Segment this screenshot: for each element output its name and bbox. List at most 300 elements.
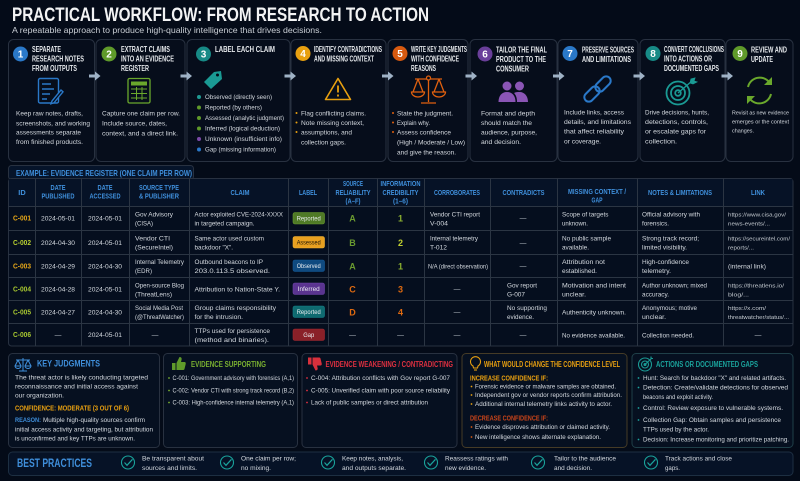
table header row: MISSING CONTEXT /: [568, 187, 626, 196]
step body: [645, 109, 709, 145]
practice 3: and outputs separate.: [342, 465, 406, 472]
step body: [481, 110, 537, 146]
row C-002: reports/...: [728, 246, 755, 252]
step body: [102, 110, 180, 137]
step body: screenshots, and working: [16, 120, 90, 127]
weakening list: C-005: Unverified claim with poor source reliability: [311, 388, 451, 395]
row C-002: (SecureIntel): [135, 245, 173, 252]
heading: ACTIONS OR DOCUMENTED GAPS: [656, 359, 758, 369]
actions list: Hunt: Search for backdoor "X" and related artifacts.: [643, 375, 786, 382]
icon: thumbs up: [172, 357, 186, 370]
step number 6: 6: [482, 50, 488, 61]
step bullets: collection gaps.: [301, 139, 346, 146]
icon: warning triangle: [326, 78, 350, 100]
row C-001: https://www.cisa.gov/: [728, 212, 787, 218]
row C-005: D: [349, 308, 356, 318]
step body: [732, 110, 789, 134]
practice 2: One claim per row;: [241, 456, 296, 463]
confidence rating: CONFIDENCE: MODERATE (3 OUT OF 6): [15, 404, 129, 412]
panel: what would change the confidence level: [462, 354, 627, 448]
reason: initial access activity and targeting, but attribution: [15, 426, 153, 433]
table header row: SOURCE: [343, 179, 363, 188]
step heading: REASONS: [411, 64, 436, 73]
row C-001: A: [349, 214, 356, 224]
row C-003: [13, 259, 766, 275]
step heading: REGISTER: [121, 64, 149, 73]
row C-003: 203.0.113.5 observed.: [194, 268, 270, 275]
judgment text: [15, 374, 148, 399]
step body: Drive decisions, hunts,: [645, 109, 709, 116]
row C-004: blog/...: [728, 292, 750, 298]
label legend: Observed (directly seen): [205, 94, 272, 101]
row C-003: established.: [562, 268, 597, 275]
label legend: Assessed (analytic judgment): [205, 115, 284, 122]
table header row: DATE: [98, 183, 113, 192]
arrows between steps: [89, 72, 733, 80]
step bullets: [296, 110, 366, 146]
row C-001: 2024-05-01: [88, 216, 122, 222]
title: PRACTICAL WORKFLOW: FROM RESEARCH TO ACTION: [12, 4, 429, 26]
row C-001: (CISA): [135, 220, 153, 227]
row C-001: Vendor CTI report: [430, 211, 480, 218]
step heading: [582, 46, 634, 64]
practice 5: [532, 456, 616, 472]
step heading: INTO ACTIONS OR: [664, 54, 712, 64]
row C-004: Motivation and intent: [562, 282, 626, 289]
row C-003: Internal Telemetry: [135, 259, 185, 266]
panel: step 2 extract claims: [96, 40, 185, 162]
practice 1: sources and limits.: [142, 465, 197, 472]
step number 1: 1: [18, 50, 24, 61]
practice 2: [220, 456, 296, 472]
row C-004: 3: [398, 284, 403, 294]
step number 5: 5: [397, 49, 403, 60]
step body: context, and a direct link.: [102, 130, 178, 137]
supporting list: C-002: Vendor CTI with strong track record (B,2): [172, 388, 294, 395]
step number 9: 9: [737, 49, 743, 60]
actions list: [638, 375, 789, 444]
step heading: UPDATE: [751, 55, 773, 64]
step body: Capture one claim per row.: [102, 110, 180, 117]
table header row: RELIABILITY: [336, 188, 371, 197]
step bullets: State the judgment.: [397, 110, 453, 117]
row C-004: —: [454, 286, 461, 293]
table header row: CREDIBILITY: [382, 188, 419, 197]
row C-006: —: [520, 332, 527, 339]
table header row: (A–F): [346, 196, 361, 206]
row C-004: 2024-05-01: [88, 286, 122, 293]
row C-002: Same actor used custom: [194, 236, 264, 243]
heading: EVIDENCE SUPPORTING: [191, 359, 266, 369]
row C-005: Group claims responsibility: [194, 305, 277, 312]
row C-005: 4: [398, 308, 403, 318]
panel: step 1 separate research notes: [8, 40, 94, 162]
row C-003: 2024-04-30: [88, 263, 122, 270]
row C-001: Actor exploited CVE-2024-XXXX: [194, 211, 283, 218]
row C-001: Official advisory with: [642, 211, 700, 218]
row C-002: Strong track record;: [642, 236, 699, 243]
step bullets: (High / Moderate / Low): [397, 139, 465, 146]
step heading: EXTRACT CLAIMS: [121, 45, 170, 54]
decrease confidence: DECREASE CONFIDENCE IF:: [470, 414, 548, 422]
supporting list: [168, 375, 294, 407]
icon: target with arrow: [666, 78, 697, 104]
row C-003: Attribution not: [562, 259, 605, 266]
row C-002: limited visibility.: [642, 245, 687, 252]
panel: step 4 contradictions: [291, 40, 386, 162]
row C-003: —: [520, 263, 527, 270]
icon: question bulb: [470, 357, 480, 370]
row C-003: N/A (direct observation): [428, 263, 488, 270]
icon: balance scales: [412, 76, 446, 103]
table header row: ID: [18, 188, 26, 197]
increase confidence: Additional internal telemetry links activity to actor.: [475, 401, 612, 408]
row C-001: unknown.: [562, 220, 588, 227]
heading: BEST PRACTICES: [17, 458, 92, 470]
row C-005: https://x.com/: [728, 306, 767, 312]
row C-001: forensics.: [642, 220, 669, 227]
step body: changes.: [732, 128, 754, 134]
actions list: Decision: Increase monitoring and prioritize patching.: [643, 437, 789, 444]
row C-003: C-003: [13, 263, 31, 270]
step heading: WITH CONFIDENCE: [411, 54, 459, 64]
panel: key judgments: [8, 354, 160, 448]
row C-004: Attribution to Nation-State Y.: [194, 286, 280, 293]
row C-002: https://secureintel.com/: [728, 237, 791, 243]
label legend: [197, 94, 284, 154]
row C-001: 2024-05-01: [41, 216, 75, 222]
row C-005: C-005: [13, 309, 31, 316]
step bullets: Note missing context,: [301, 120, 364, 127]
step heading: [411, 45, 467, 73]
step body: or coverage.: [564, 138, 601, 145]
icon: thumbs down: [308, 358, 322, 370]
step body: Format and depth: [481, 110, 535, 117]
heading: WHAT WOULD CHANGE THE CONFIDENCE LEVEL: [484, 359, 620, 369]
table header row: SOURCE TYPE: [139, 183, 179, 192]
practice 3: Keep notes, analysis,: [342, 456, 403, 463]
step body: Keep raw notes, drafts,: [16, 110, 83, 117]
step heading: LABEL EACH CLAIM: [215, 45, 275, 54]
row C-003: Outbound beacons to IP: [194, 259, 263, 266]
step heading: TAILOR THE FINAL: [496, 46, 547, 54]
table header row: LABEL: [299, 188, 317, 197]
panel: step 7 preserve sources: [558, 40, 638, 162]
step heading: RESEARCH NOTES: [32, 54, 84, 64]
step number 2: 2: [106, 50, 112, 61]
step number 3: 3: [201, 50, 207, 61]
step heading: [314, 45, 382, 64]
panel: evidence weakening: [302, 354, 457, 448]
row C-005: (@ThreatWatcher): [135, 314, 184, 321]
step body: or escalate gaps for: [645, 128, 707, 135]
step heading: REVIEW AND: [751, 46, 787, 54]
row C-002: Internal telemetry: [430, 236, 479, 243]
label legend: Inferred (logical deduction): [205, 126, 280, 132]
row C-004: accuracy.: [642, 291, 669, 298]
practice 4: new evidence.: [445, 465, 486, 472]
row C-006: —: [55, 332, 62, 339]
step heading: [751, 46, 787, 64]
row C-005: for the intrusion.: [194, 314, 243, 321]
weakening list: C-004: Attribution conflicts with Gov report G-007: [311, 375, 450, 382]
icon: people: [498, 82, 528, 102]
panel: step 6 tailor: [470, 40, 557, 162]
row C-006: —: [454, 332, 461, 339]
step body: Revisit as new evidence: [732, 110, 789, 116]
step heading: INTO AN EVIDENCE: [121, 54, 174, 64]
row C-004: (ThreatLens): [135, 291, 172, 298]
table header row: CORROBORATES: [434, 188, 480, 197]
heading: KEY JUDGMENTS: [37, 358, 100, 368]
panel: step 8 convert conclusions: [640, 40, 725, 162]
decrease confidence: Evidence disproves attribution or claimed activity.: [475, 424, 610, 431]
step heading: SEPARATE: [32, 45, 61, 54]
actions list: Control: Review exposure to vulnerable systems.: [643, 405, 783, 412]
table header row: LINK: [751, 188, 766, 197]
row C-001: in targeted campaign.: [194, 220, 255, 227]
row C-004: [13, 282, 785, 298]
step heading: [32, 45, 84, 73]
step heading: CONSUMER: [496, 64, 529, 74]
step heading: [496, 46, 547, 74]
row C-005: unclear.: [642, 314, 666, 321]
table header row: NOTES & LIMITATIONS: [648, 188, 712, 197]
row C-006: 2024-05-01: [88, 332, 122, 339]
reason: is unconfirmed and key TTPs are unknown.: [15, 435, 135, 442]
judgment text: The threat actor is likely conducting targeted: [15, 374, 148, 381]
row C-003: (EDR): [135, 268, 152, 275]
row C-005: Reported: [297, 310, 321, 316]
practice 2: no mixing.: [241, 465, 271, 472]
step heading: PRODUCT TO THE: [496, 55, 546, 64]
decrease confidence: [470, 414, 610, 441]
subtitle: A repeatable approach to produce high-quality intelligence that drives decisions.: [12, 25, 322, 35]
step heading: WRITE KEY JUDGMENTS: [411, 45, 467, 54]
step body: that affect reliability: [564, 128, 625, 135]
step heading: AND LIMITATIONS: [582, 55, 631, 64]
practice 1: [122, 456, 204, 472]
step body: from finished products.: [16, 139, 83, 146]
row C-004: 2024-04-28: [41, 286, 75, 293]
row C-006: (method and binaries).: [194, 337, 269, 344]
row C-001: Scope of targets: [562, 211, 609, 218]
row C-003: 2024-04-29: [41, 263, 75, 270]
row C-003: (internal link): [728, 264, 766, 270]
row C-001: Reported: [297, 216, 321, 222]
supporting list: C-003: High-confidence internal telemetry (A,1): [172, 400, 294, 407]
row C-005: —: [454, 309, 461, 316]
panel: best practices: [8, 452, 793, 476]
row C-003: Observed: [297, 264, 321, 270]
increase confidence: Forensic evidence or malware samples are obtained.: [475, 384, 616, 391]
icon: scales: [15, 358, 31, 371]
practice 6: [644, 456, 732, 472]
table header row: CLAIM: [230, 188, 250, 197]
row C-003: A: [349, 261, 356, 271]
row C-006: —: [755, 332, 762, 339]
practice 1: Be transparent about: [142, 456, 204, 463]
step bullets: and give the reason.: [397, 149, 456, 156]
step body: assessments separate: [16, 129, 81, 136]
table header row: (1–6): [393, 196, 408, 206]
panel: step 5 key judgments: [388, 40, 468, 162]
row C-002: No public sample: [562, 236, 611, 243]
panel: actions or documented gaps: [632, 354, 793, 448]
step heading: IDENTIFY CONTRADICTIONS: [314, 45, 382, 54]
step body: details, and limitations: [564, 119, 632, 126]
panel: step 9 review and update: [726, 40, 793, 162]
table header row: INFORMATION: [380, 179, 420, 188]
evidence register table: [8, 178, 793, 346]
label legend: Unknown (insufficient info): [205, 136, 282, 143]
label legend: Reported (by others): [205, 104, 262, 112]
reason: [15, 417, 153, 442]
icon: spreadsheet: [128, 78, 150, 103]
step bullets: Assess confidence: [397, 129, 451, 136]
table header row: GAP: [592, 196, 603, 204]
row C-003: 1: [398, 261, 403, 271]
row C-006: [13, 328, 762, 344]
table tab heading: [8, 166, 194, 180]
row C-005: threatwatcher/status/...: [728, 315, 790, 321]
decrease confidence: New intelligence shows alternate explanation.: [475, 434, 601, 441]
practice 6: Track actions and close: [665, 456, 732, 463]
row C-001: [13, 211, 787, 227]
step bullets: assumptions, and: [301, 129, 352, 136]
step bullets: [392, 110, 465, 156]
row C-002: available.: [562, 245, 589, 252]
step heading: [121, 45, 174, 73]
actions list: beacons and exploit activity.: [643, 394, 713, 401]
table header row: ACCESSED: [90, 192, 121, 200]
step heading: DOCUMENTED GAPS: [664, 64, 719, 73]
row C-006: —: [349, 332, 356, 339]
row C-004: C-004: [13, 286, 31, 293]
icon: chain link: [582, 74, 613, 104]
practice 6: gaps.: [665, 465, 680, 472]
row C-006: Collection needed.: [642, 332, 694, 339]
row C-002: backdoor "X".: [194, 245, 233, 252]
table tab heading: EXAMPLE: EVIDENCE REGISTER (ONE CLAIM PER ROW): [16, 168, 192, 178]
step body: audience, purpose,: [481, 129, 537, 136]
row C-005: evidence.: [507, 314, 534, 321]
practice 5: and decision.: [554, 465, 592, 472]
row C-005: 2024-04-27: [41, 309, 75, 316]
step heading: [664, 45, 724, 73]
panel: step 3 label each claim: [187, 40, 290, 162]
step body: Include source, dates,: [102, 120, 167, 127]
step heading: AND MISSING CONTEXT: [314, 54, 374, 64]
step body: and decision.: [481, 139, 521, 146]
row C-003: telemetry.: [642, 268, 671, 275]
row C-006: C-006: [13, 332, 31, 339]
row C-001: V-004: [430, 220, 448, 227]
row C-001: Gov Advisory: [135, 211, 174, 218]
step heading: PRESERVE SOURCES: [582, 46, 634, 54]
row C-005: 2024-04-30: [88, 309, 122, 316]
table header row: [18, 179, 766, 206]
row C-004: G-007: [507, 291, 525, 298]
step number 4: 4: [300, 49, 306, 60]
practice 4: [424, 456, 508, 472]
row C-001: C-001: [13, 216, 31, 222]
row C-004: Open-source Blog: [135, 282, 184, 289]
row C-004: Author unknown; mixed: [642, 282, 707, 289]
row C-004: https://threatlens.io/: [728, 283, 785, 289]
row C-005: [13, 305, 790, 321]
row C-004: Gov report: [507, 282, 537, 289]
actions list: TTPs used by the actor.: [643, 427, 709, 434]
table header row: & PUBLISHER: [139, 192, 180, 200]
heading: EVIDENCE WEAKENING / CONTRADICTING: [326, 359, 453, 369]
practice 3: [322, 456, 406, 472]
step number 7: 7: [567, 49, 573, 60]
supporting list: C-001: Government advisory with forensics (A,1): [172, 375, 294, 382]
row C-002: B: [349, 238, 356, 248]
row C-006: Gap: [303, 333, 315, 339]
step number 8: 8: [650, 49, 656, 60]
row C-002: T-012: [430, 245, 447, 252]
step body: detections, controls,: [645, 119, 708, 126]
row C-002: —: [520, 240, 527, 247]
row C-005: Authenticity unknown.: [562, 309, 626, 316]
row C-002: 2024-04-30: [41, 240, 75, 247]
step body: [16, 110, 90, 146]
row C-006: TTPs used for persistence: [194, 328, 270, 335]
step bullets: Explain why.: [397, 120, 430, 127]
icon: target: [638, 356, 653, 371]
practice 4: Reassess ratings with: [445, 456, 508, 463]
reason: Multiple high-quality sources confirm: [43, 417, 145, 424]
panel: evidence supporting: [164, 354, 298, 448]
row C-002: Assessed: [297, 240, 321, 246]
row C-001: news-events/...: [728, 221, 771, 227]
row C-002: 2: [398, 238, 403, 248]
increase confidence: INCREASE CONFIDENCE IF:: [470, 374, 548, 382]
row C-002: C-002: [13, 240, 31, 247]
row C-004: C: [349, 284, 356, 294]
step body: [564, 109, 632, 145]
table header row: DATE: [50, 183, 66, 192]
step body: emerges or the context: [732, 120, 789, 126]
icon: refresh arrows: [747, 77, 772, 104]
table header row: PUBLISHED: [42, 192, 75, 200]
weakening list: [306, 375, 451, 407]
judgment text: our organization.: [15, 392, 64, 399]
row C-005: No supporting: [507, 305, 547, 312]
increase confidence: Independent gov or vendor reports confirm attribution.: [475, 392, 622, 399]
judgment text: reconnaissance and initial access against: [15, 383, 138, 390]
table header row: CONTRADICTS: [502, 188, 545, 197]
step body: should match the: [481, 120, 532, 127]
row C-001: 1: [398, 214, 403, 224]
actions list: Collection Gap: Obtain samples and persistence: [643, 417, 782, 424]
label legend: Gap (missing information): [205, 146, 276, 154]
icon: document with pencil: [38, 78, 63, 104]
row C-005: Anonymous; motive: [642, 305, 697, 312]
row C-006: —: [152, 332, 159, 339]
row C-002: Vendor CTI: [135, 236, 170, 243]
icon: tag: [204, 71, 222, 89]
practice 5: Tailor to the audience: [554, 456, 616, 463]
row C-001: —: [520, 216, 527, 222]
row C-006: No evidence available.: [562, 332, 625, 339]
step body: collection.: [645, 138, 677, 145]
row C-002: [13, 236, 791, 252]
row C-006: —: [397, 332, 404, 339]
row C-004: Inferred: [298, 287, 320, 293]
